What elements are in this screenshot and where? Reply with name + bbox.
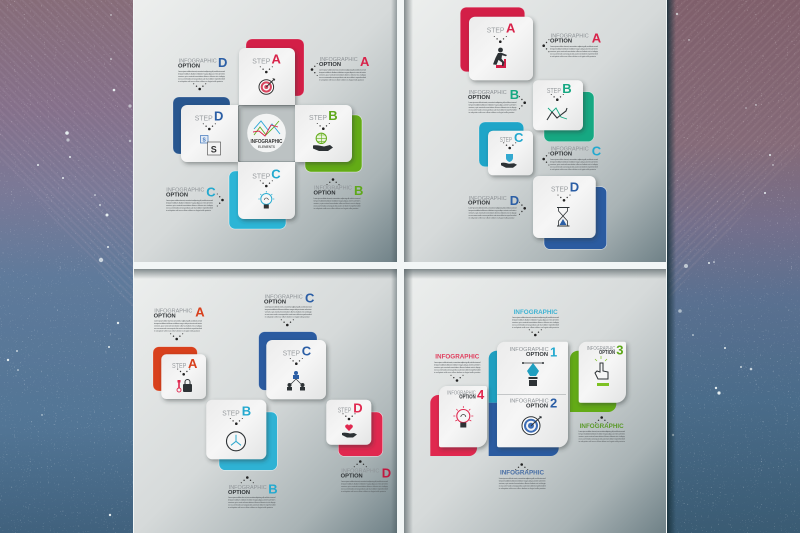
text: option D [468,193,519,220]
back tab: blue C [259,332,317,390]
text: option D: INFOGRAPHIC [179,58,217,64]
card: step D [326,400,371,445]
card: step D [181,105,238,162]
text: bottom blue block: Lorem ipsum dolor sit amet, consectetur adipiscing elit, sed do eiusmod [499,477,546,480]
text: option C: ex ea commodo consequat duis aute irure dolor in reprehenderit [265,313,312,316]
card: step D: D [570,180,579,195]
card: option 3: INFOGRAPHIC [587,346,615,352]
text: option C: OPTION [550,152,572,158]
background: right starfield [665,0,800,533]
arrow: option C right [217,193,224,207]
text: option D: in voluptate velit esse cillum dolore eu fugiat nulla pariatur [178,80,223,83]
card: options 1 and 2: INFOGRAPHIC [510,398,549,404]
text: option C: INFOGRAPHIC [265,294,303,300]
card: step A: A [272,51,282,66]
card: option 3 [579,342,626,403]
text: option B: tempor incididunt ut labore et dolore magna aliqua ut enim ad minim [228,498,276,502]
icon: red bulb [453,406,473,428]
arrow: option A left [542,39,549,52]
text: option C: tempor incididunt ut labore et dolore magna aliqua ut enim ad minim [265,308,312,311]
card: step B [206,400,266,459]
text: option C: C [206,185,216,200]
text: option A: veniam, quis nostrud exercitation ullamco laboris nisi ut aliquip [319,74,367,76]
card: step A [239,48,295,105]
text: option A: Lorem ipsum dolor sit amet, consectetur adipiscing elit, sed do eiusmod [154,320,203,322]
icon: light bulb [258,191,274,208]
card: step B: STEP [222,411,240,418]
text: option B: B [510,87,519,102]
icon: target blue [522,416,542,435]
text: right green block: tempor incididunt ut labore et dolore magna aliqua ut enim ad minim [578,432,625,436]
card: options 1 and 2: OPTION [526,403,548,409]
text: left red block: in voluptate velit esse cillum dolore eu fugiat nulla pariatur [434,371,481,374]
back tab: cyan C [229,171,286,229]
card: step A [161,354,206,399]
text: option A: veniam, quis nostrud exercitation ullamco laboris nisi ut aliquip [550,50,599,53]
card: step B: B [562,81,572,96]
text: option B: veniam, quis nostrud exercitation ullamco laboris nisi ut aliquip [314,202,361,205]
card: step C: C [302,344,312,359]
text: option A: in voluptate velit esse cillum dolore eu fugiat nulla pariatur [550,55,596,58]
panel 1: cross layout [133,0,667,533]
text: option C: INFOGRAPHIC [166,188,204,194]
text: option C [264,291,315,318]
back tab: cyan C [479,122,524,167]
icon: pointing hand [595,356,609,386]
card: step A: STEP [487,28,505,35]
card: option 4: 4 [477,387,485,402]
text: option A [154,305,205,332]
text: option C: tempor incididunt ut labore et dolore magna aliqua ut enim ad minim [550,160,598,164]
arrow: option D right [519,202,526,215]
text: top cyan block: in voluptate velit esse cillum dolore eu fugiat nulla pariatur [512,326,559,329]
card: step C: C [271,166,281,181]
text: option D: ex ea commodo consequat duis aute irure dolor in reprehenderit [468,214,517,217]
icon: shield on hand [501,154,517,168]
icon: globe on hand [313,133,333,151]
arrow: right block up [595,416,608,423]
icon: scale box: S [211,144,217,154]
text: option B: Lorem ipsum dolor sit amet, consectetur adipiscing elit, sed do eiusmod [228,496,276,499]
text: option C: C [592,144,602,159]
text: option B: B [354,183,363,198]
back tab: cyan B [219,412,277,470]
arrow: option A down [170,333,183,340]
card: step C: C [514,130,524,145]
text: option B: INFOGRAPHIC [229,485,267,491]
text: option D: INFOGRAPHIC [469,196,507,202]
text: option A: OPTION [319,62,341,68]
text: option D: tempor incididunt ut labore et dolore magna aliqua ut enim ad minim [468,209,517,212]
arrow: left block down [450,375,464,382]
text: option B: in voluptate velit esse cillum dolore eu fugiat nulla pariatur [228,506,273,509]
text: option B: in voluptate velit esse cillum dolore eu fugiat nulla pariatur [314,207,359,210]
text: bottom blue block: in voluptate velit esse cillum dolore eu fugiat nulla pariatur [499,487,546,490]
text: option D [341,466,391,493]
text: option C: Lorem ipsum dolor sit amet, consectetur adipiscing elit, sed do eiusmod [265,306,312,308]
card: step C [488,130,533,175]
text: bottom blue block: INFOGRAPHIC [500,470,544,477]
card: step A: A [506,21,516,36]
card: step C [266,340,326,399]
text: option A: ex ea commodo consequat duis aute irure dolor in reprehenderit [154,327,202,330]
card: step C: STEP [252,173,271,180]
back tab: blue D [173,97,230,154]
card: options 1 and 2: 1 [550,344,557,359]
text: option B: Lorem ipsum dolor sit amet, consectetur adipiscing elit, sed do eiusmod [314,197,361,200]
text: option B: veniam, quis nostrud exercitation ullamco laboris nisi ut aliquip [228,501,276,504]
center inset square [238,105,296,162]
text: left red block: tempor incididunt ut labore et dolore magna aliqua ut enim ad minim [434,364,481,366]
text: option D: ex ea commodo consequat duis aute irure dolor in reprehenderit [341,488,388,490]
text: top cyan block: Lorem ipsum dolor sit amet, consectetur adipiscing elit, sed do eiusmod [512,316,560,319]
card: step D: D [214,109,223,124]
card: option 3: 3 [616,342,624,357]
card: step B [533,80,583,130]
card: options 1 and 2 [497,342,568,447]
text: option A [319,54,370,82]
text: option D: Lorem ipsum dolor sit amet, consectetur adipiscing elit, sed do eiusmod [341,480,389,483]
text: option D: veniam, quis nostrud exercitation ullamco laboris nisi ut aliquip [178,75,226,78]
text: option A: tempor incididunt ut labore et dolore magna aliqua ut enim ad minim [154,322,202,325]
text: option D: OPTION [468,201,490,207]
text: left red block: ex ea commodo consequat duis aute irure dolor in reprehenderit [434,368,481,372]
arrow: top block down [529,329,542,336]
text: top cyan block: ex ea commodo consequat duis aute irure dolor in reprehenderit [512,324,559,326]
card: option 4: INFOGRAPHIC [447,391,476,397]
text: option A: tempor incididunt ut labore et dolore magna aliqua ut enim ad minim [319,71,366,74]
text: option A: tempor incididunt ut labore et dolore magna aliqua ut enim ad minim [550,48,598,50]
text: option C: OPTION [264,299,286,305]
arrow: option A left [311,63,318,76]
text: option D: veniam, quis nostrud exercitation ullamco laboris nisi ut aliquip [341,485,389,488]
icon: clock [226,432,246,451]
text: option D: OPTION [341,474,363,480]
card: step B: B [328,108,338,123]
text: option B: OPTION [314,190,336,196]
text: option B [228,482,278,509]
arrow: option B up [326,178,340,185]
text: top cyan block: INFOGRAPHIC [514,309,558,316]
text: option B [468,87,519,114]
text: option A: A [592,31,602,46]
arrow: option B up [241,476,254,483]
text: option D [178,55,227,83]
text: option B: tempor incididunt ut labore et dolore magna aliqua ut enim ad minim [314,200,361,202]
text: option B: Lorem ipsum dolor sit amet, consectetur adipiscing elit, sed do eiusmod [468,101,517,104]
text: bottom blue block: tempor incididunt ut labore et dolore magna aliqua ut enim ad minim [499,480,546,482]
text: top cyan block: tempor incididunt ut labore et dolore magna aliqua ut enim ad minim [512,318,559,322]
text: right green block: ex ea commodo consequat duis aute irure dolor in reprehenderit [578,438,625,440]
icon: target [259,78,275,94]
text: right green block: veniam, quis nostrud exercitation ullamco laboris nisi ut aliquip [578,435,626,438]
arrow: bottom block up [515,463,528,470]
text: left red block: INFOGRAPHIC [435,354,480,361]
text: bottom blue block: veniam, quis nostrud exercitation ullamco laboris nisi ut aliquip [499,482,546,485]
text: option A: in voluptate velit esse cillum dolore eu fugiat nulla pariatur [319,78,364,82]
back tab: red A [246,39,304,96]
text: option B: ex ea commodo consequat duis aute irure dolor in reprehenderit [468,108,517,112]
text: option B: OPTION [468,95,490,101]
back tab: green B [305,115,362,172]
text: option C: OPTION [166,193,188,199]
center emblem: infographic elements [247,114,286,152]
text: option D: tempor incididunt ut labore et dolore magna aliqua ut enim ad minim [178,72,225,76]
icon: people hierarchy [287,371,305,390]
text: option C: in voluptate velit esse cillum dolore eu fugiat nulla pariatur [265,316,310,318]
text: top cyan block [512,309,560,329]
text: right green block: in voluptate velit esse cillum dolore eu fugiat nulla pariatur [578,440,625,443]
text: left red block: veniam, quis nostrud exercitation ullamco laboris nisi ut aliquip [434,366,481,369]
card: step A: STEP [172,363,187,370]
panel 3: zigzag layout [134,269,397,533]
icon: heart on hand [342,424,357,438]
card: option 4: OPTION [459,395,476,401]
text: option B: OPTION [228,490,250,496]
text: option B: INFOGRAPHIC [314,185,352,191]
card: option 4 [439,386,487,447]
card: step A [469,17,533,80]
card: step B: STEP [309,115,327,122]
card: step A: STEP [252,58,271,65]
text: option D: tempor incididunt ut labore et dolore magna aliqua ut enim ad minim [341,482,388,486]
text: option A: Lorem ipsum dolor sit amet, consectetur adipiscing elit, sed do eiusmod [319,68,367,72]
text: option C: veniam, quis nostrud exercitation ullamco laboris nisi ut aliquip [265,310,312,314]
text: option C: in voluptate velit esse cillum dolore eu fugiat nulla pariatur [550,168,596,171]
icon: runner on stairs [493,48,507,68]
text: option B: B [268,482,278,497]
text: option C: veniam, quis nostrud exercitation ullamco laboris nisi ut aliquip [550,163,599,166]
arrow: option D down [193,83,206,90]
card: step D: STEP [338,407,352,414]
text: option B: INFOGRAPHIC [469,90,507,96]
back tab: red A [460,7,525,72]
text: option B: veniam, quis nostrud exercitation ullamco laboris nisi ut aliquip [468,106,517,109]
text: option A: A [195,305,205,320]
text: option A: in voluptate velit esse cillum dolore eu fugiat nulla pariatur [154,330,200,332]
text: option C [550,144,602,171]
text: bottom blue block [499,470,546,490]
text: option A: INFOGRAPHIC [320,57,358,63]
text: right green block: INFOGRAPHIC [580,423,624,430]
center emblem: infographic elements: INFOGRAPHIC [250,139,283,145]
back tab: red 4 [430,395,477,456]
text: bottom blue block: ex ea commodo consequat duis aute irure dolor in reprehenderit [499,484,546,488]
text: option C: in voluptate velit esse cillum dolore eu fugiat nulla pariatur [166,209,211,212]
text: option C [166,185,216,212]
text: option D: in voluptate velit esse cillum dolore eu fugiat nulla pariatur [341,490,386,493]
icon: scale box: S [203,138,207,144]
text: option A: A [360,54,370,69]
back tab: green B [544,92,594,142]
card: step C [238,162,295,219]
text: option A: veniam, quis nostrud exercitation ullamco laboris nisi ut aliquip [154,324,203,328]
text: option A: ex ea commodo consequat duis aute irure dolor in reprehenderit [550,52,598,56]
text: right green block [578,423,626,443]
back tab: orange A [153,347,197,391]
text: option D: Lorem ipsum dolor sit amet, consectetur adipiscing elit, sed do eiusmod [468,206,517,210]
back tab: red D [338,412,383,456]
card: options 1 and 2: 2 [550,396,557,410]
text: option D: INFOGRAPHIC [341,469,379,475]
panel 4: numbered options [404,269,666,533]
text: option B: ex ea commodo consequat duis aute irure dolor in reprehenderit [314,204,361,208]
text: option C: Lorem ipsum dolor sit amet, consectetur adipiscing elit, sed do eiusmod [166,199,214,202]
icon: scale box [200,136,220,155]
card: step B: B [242,404,251,419]
card: step B: STEP [547,88,561,95]
card: step C: STEP [283,351,300,358]
card: options 1 and 2: INFOGRAPHIC [510,347,549,353]
text: option C: C [305,291,315,306]
text: option A: INFOGRAPHIC [551,33,589,39]
text: option B: in voluptate velit esse cillum dolore eu fugiat nulla pariatur [468,111,515,114]
card: step D: STEP [551,187,569,194]
text: top cyan block: veniam, quis nostrud exercitation ullamco laboris nisi ut aliquip [512,321,560,324]
text: option A: Lorem ipsum dolor sit amet, consectetur adipiscing elit, sed do eiusmod [550,45,599,48]
text: option D: ex ea commodo consequat duis aute irure dolor in reprehenderit [178,78,225,80]
text: left red block [434,354,481,374]
text: option A: ex ea commodo consequat duis aute irure dolor in reprehenderit [319,76,366,79]
card: step D [533,176,596,238]
text: option C: veniam, quis nostrud exercitation ullamco laboris nisi ut aliquip [166,204,214,207]
card: step C: STEP [500,137,512,144]
text: option C: Lorem ipsum dolor sit amet, consectetur adipiscing elit, sed do eiusmod [550,158,599,161]
arrow: option B right [519,96,526,109]
text: option C: ex ea commodo consequat duis aute irure dolor in reprehenderit [550,166,598,168]
arrow: option C down [281,319,294,326]
text: option B: tempor incididunt ut labore et dolore magna aliqua ut enim ad minim [468,104,517,106]
text: option D: Lorem ipsum dolor sit amet, consectetur adipiscing elit, sed do eiusmod [178,70,226,73]
arrow: option D up [354,460,367,467]
panel 2: vertical staircase [404,0,666,262]
text: option A: OPTION [154,313,176,319]
text: option D: veniam, quis nostrud exercitation ullamco laboris nisi ut aliquip [468,212,517,214]
text: option A: INFOGRAPHIC [154,308,192,314]
card: step D: STEP [195,116,213,123]
back tab: cyan and blue column [489,351,559,456]
text: option D: OPTION [178,63,200,69]
text: option C: INFOGRAPHIC [551,147,589,153]
card: step A: A [188,356,198,371]
text: left red block: Lorem ipsum dolor sit amet, consectetur adipiscing elit, sed do eiusmod [434,361,481,364]
text: option B: ex ea commodo consequat duis aute irure dolor in reprehenderit [228,504,276,506]
background: left starfield [0,0,135,533]
arrow: option C left [542,152,549,166]
text: option C: ex ea commodo consequat duis aute irure dolor in reprehenderit [166,206,213,210]
text: option D: D [382,466,391,481]
card: option 3: OPTION [599,350,615,356]
text: option B [314,183,363,210]
text: option D: D [218,55,227,70]
icon: line chart [547,108,567,120]
icon: pen tool [522,362,544,386]
card: step D: D [353,400,363,415]
back tab: blue D [544,187,607,249]
text: option D: D [510,193,519,208]
icon: key and padlock [177,380,192,392]
text: option C: tempor incididunt ut labore et dolore magna aliqua ut enim ad minim [166,202,213,204]
center emblem: infographic elements: ELEMENTS [258,145,275,149]
text: option D: in voluptate velit esse cillum dolore eu fugiat nulla pariatur [468,216,515,220]
card: step B [295,105,352,162]
card: options 1 and 2: OPTION [526,352,548,358]
text: option A: OPTION [550,38,572,44]
text: option A [550,31,602,58]
back tab: green 3 [570,351,616,412]
icon: hourglass [557,208,570,226]
text: right green block: Lorem ipsum dolor sit amet, consectetur adipiscing elit, sed do eiusmod [578,430,626,433]
